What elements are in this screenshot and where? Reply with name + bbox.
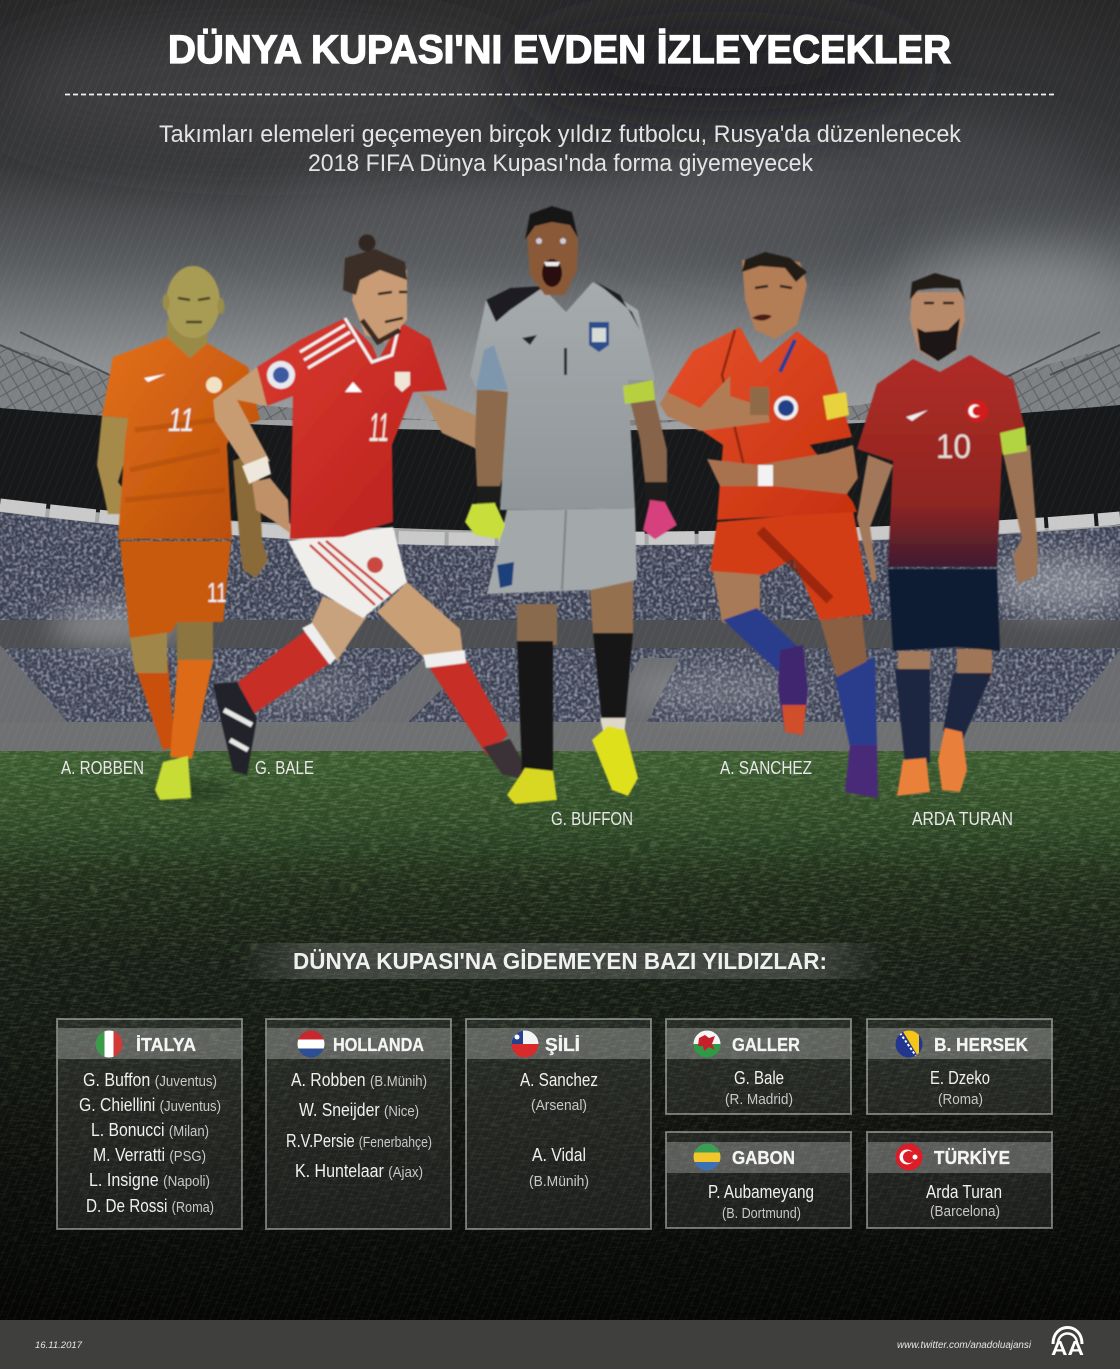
panel: Türkiye: (Barcelona) — [930, 1203, 1000, 1220]
panel: Şili: (Arsenal) — [531, 1097, 587, 1114]
player: A. Robben: 11 — [207, 577, 227, 608]
panel: Şili — [466, 1019, 651, 1229]
panel: Galler: GALLER — [732, 1035, 800, 1055]
panel: İtalya — [57, 1019, 242, 1229]
date: 16.11.2017 — [35, 1340, 83, 1351]
flag: Netherlands — [297, 1030, 325, 1058]
player: A. Robben: 11 — [168, 402, 194, 438]
intro text: Takımları elemeleri geçemeyen birçok yıldız futbolcu, Rusya'da düzenlenecek — [159, 121, 962, 148]
panel: İtalya: M. Verratti (PSG) — [93, 1145, 206, 1165]
flag: Wales — [693, 1030, 721, 1058]
flag: Gabon — [693, 1143, 721, 1172]
panel: İtalya: G. Buffon (Juventus) — [83, 1070, 217, 1090]
panel: B. Hersek: B. HERSEK — [934, 1035, 1028, 1055]
title: DÜNYA KUPASI'NI EVDEN İZLEYECEKLER — [168, 27, 951, 72]
panel: Hollanda: HOLLANDA — [333, 1035, 424, 1055]
panel: Türkiye: Arda Turan — [926, 1182, 1002, 1202]
label: A. Robben: A. ROBBEN — [61, 758, 144, 778]
player: G. Bale — [213, 234, 533, 780]
panel: Gabon: (B. Dortmund) — [722, 1205, 801, 1222]
player: G. Bale: 11 — [369, 406, 389, 450]
flag: Italy — [95, 1030, 124, 1058]
panel: Hollanda — [266, 1019, 451, 1229]
player: A. Sanchez — [660, 252, 878, 798]
dashed divider — [65, 94, 1055, 96]
flag: Bosnia — [895, 1030, 923, 1058]
panel: İtalya: G. Chiellini (Juventus) — [79, 1095, 221, 1115]
player: Arda Turan: 10 — [936, 428, 971, 466]
section heading: DÜNYA KUPASI'NA GİDEMEYEN BAZI YILDIZLAR: — [293, 948, 827, 974]
panel: Galler — [666, 1019, 851, 1114]
panel: Şili: A. Sanchez — [520, 1070, 598, 1090]
panel: Şili: A. Vidal — [532, 1145, 586, 1165]
panel: İtalya: İTALYA — [136, 1035, 196, 1055]
logo: Anadolu Agency — [1051, 1328, 1084, 1360]
panel: Hollanda: K. Huntelaar (Ajax) — [295, 1161, 423, 1181]
logo: Anadolu Agency: AA — [1051, 1338, 1084, 1360]
panel: Hollanda: R.V.Persie (Fenerbahçe) — [286, 1131, 432, 1151]
flag: Turkey — [895, 1143, 923, 1171]
panel: Hollanda: A. Robben (B.Münih) — [291, 1070, 427, 1090]
section heading — [236, 943, 886, 979]
source url: www.twitter.com/anadoluajansi — [897, 1340, 1032, 1351]
label: G. Bale: G. BALE — [255, 758, 314, 778]
panel: B. Hersek: (Roma) — [938, 1091, 983, 1108]
label: G. Buffon: G. BUFFON — [551, 809, 633, 829]
player: G. Buffon — [465, 206, 677, 804]
panel: İtalya: L. Bonucci (Milan) — [91, 1120, 209, 1140]
intro text — [159, 121, 962, 177]
panel: Hollanda: W. Sneijder (Nice) — [299, 1100, 419, 1120]
panel: İtalya: L. Insigne (Napoli) — [89, 1170, 210, 1190]
panel: Galler: (R. Madrid) — [725, 1091, 793, 1108]
panel: B. Hersek: E. Dzeko — [930, 1068, 990, 1088]
flag: Chile — [511, 1030, 539, 1058]
panel: Şili: (B.Münih) — [529, 1173, 589, 1190]
panel: B. Hersek — [867, 1019, 1052, 1114]
panel: İtalya: D. De Rossi (Roma) — [86, 1196, 214, 1216]
panel: Şili: ŞİLİ — [545, 1035, 580, 1055]
player: Arda Turan — [857, 273, 1038, 796]
player: A. Robben — [97, 266, 268, 800]
panel: Gabon: GABON — [732, 1148, 795, 1168]
label: Arda Turan: ARDA TURAN — [912, 809, 1013, 829]
panel: Gabon — [666, 1132, 851, 1228]
label: A. Sanchez: A. SANCHEZ — [720, 758, 812, 778]
panel: Türkiye — [867, 1132, 1052, 1228]
intro text: 2018 FIFA Dünya Kupası'nda forma giyemeyecek — [308, 150, 814, 177]
footer bar — [0, 1320, 1120, 1369]
panel: Gabon: P. Aubameyang — [708, 1182, 814, 1202]
panel: Galler: G. Bale — [734, 1068, 784, 1088]
panel: Türkiye: TÜRKİYE — [934, 1148, 1010, 1168]
